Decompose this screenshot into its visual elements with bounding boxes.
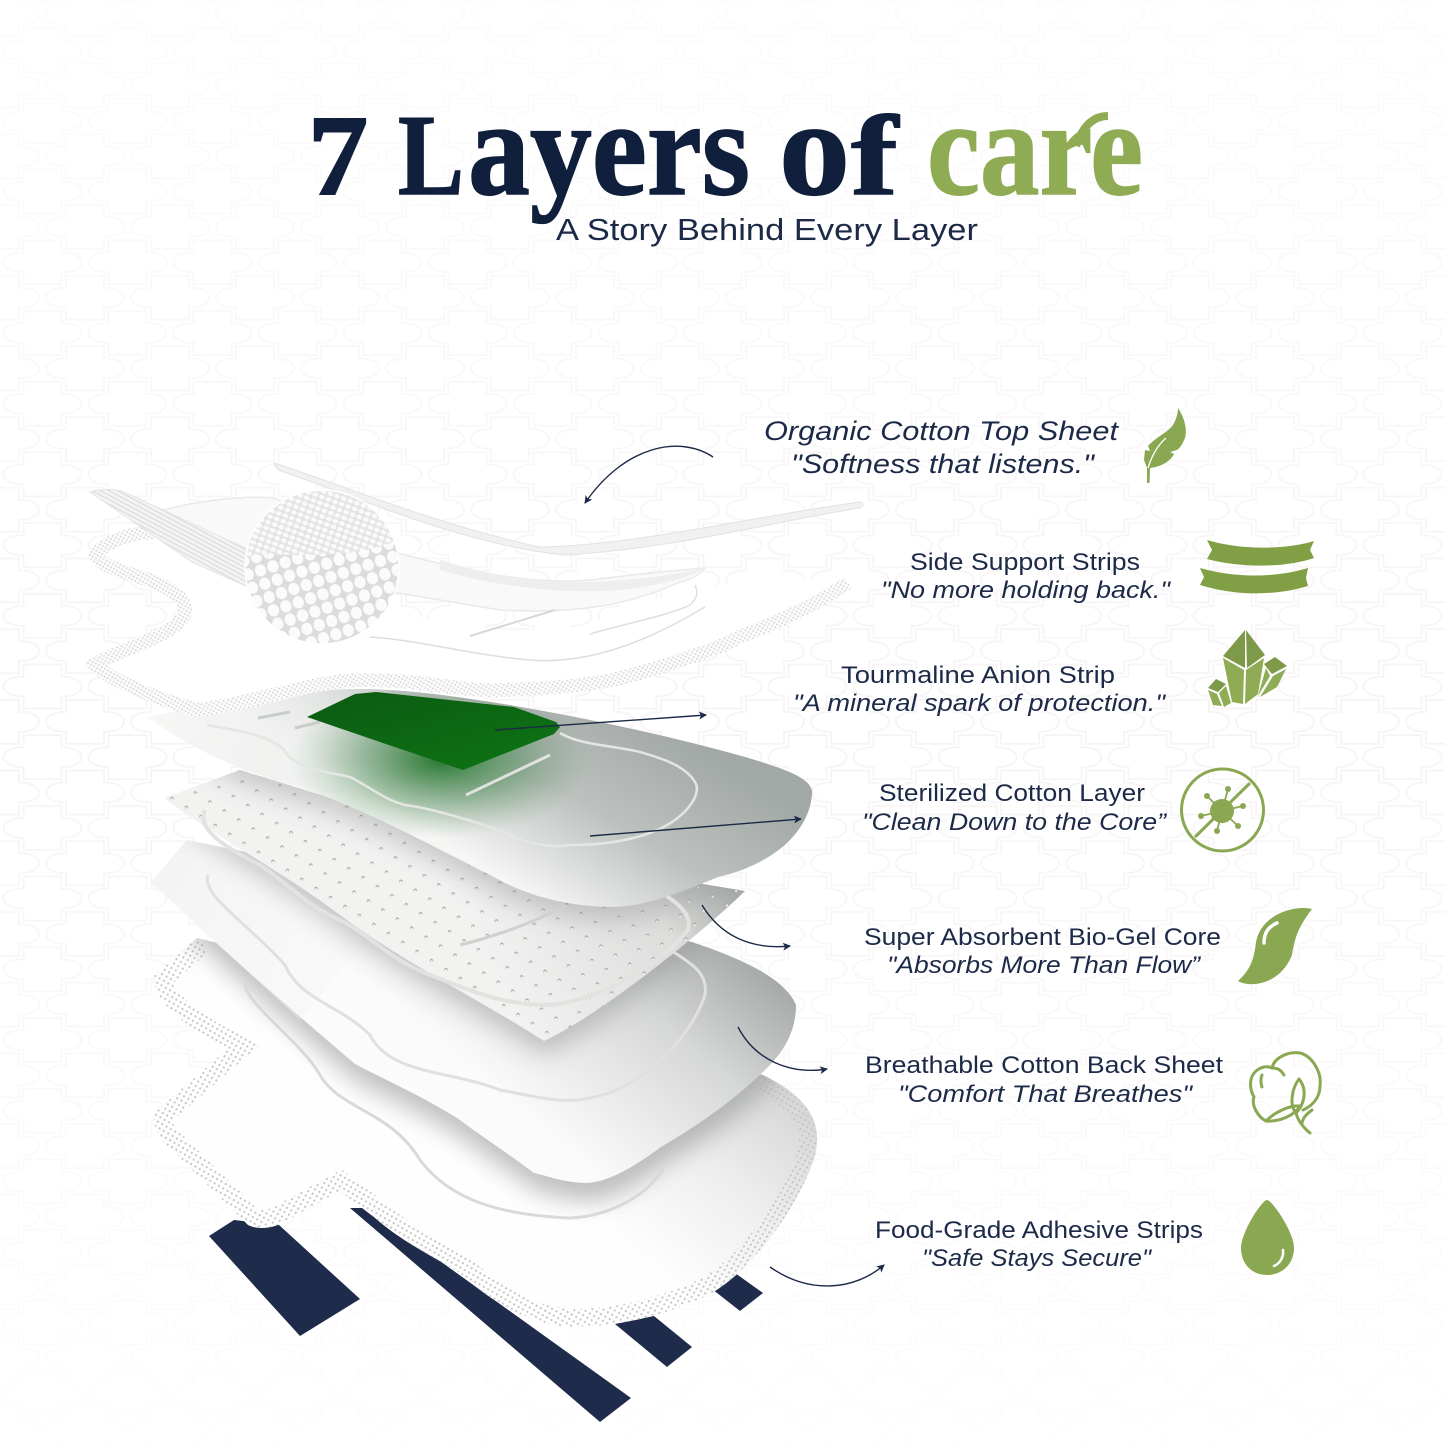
- layer 3: sterilized cotton layer: [147, 682, 812, 907]
- zoom circle: knit texture: [244, 490, 398, 644]
- text: sterilized cotton layer: [862, 780, 1167, 836]
- text: tourmaline anion strip: [793, 662, 1167, 717]
- subtitle: A Story Behind Every Layer: [556, 212, 978, 247]
- text: side support strips: [881, 549, 1172, 604]
- arrow: tourmaline strip: [495, 715, 706, 730]
- icon: water drop: [1241, 1200, 1294, 1275]
- title: care: [927, 74, 1143, 224]
- text: sterilized cotton layer: Sterilized Cotton Layer: [879, 780, 1145, 807]
- icon: ribbons: [1200, 540, 1314, 593]
- title: o: [779, 74, 850, 224]
- text: side support strips: "No more holding back.": [881, 577, 1172, 604]
- layer 5: breathable back sheet: [152, 840, 796, 1183]
- pad exploded diagram: [85, 463, 863, 1422]
- text: super absorbent bio-gel core: Super Absorbent Bio-Gel Core: [864, 924, 1221, 951]
- arrow: sterilized cotton: [590, 819, 801, 836]
- stitched edge of wing sheet: [85, 525, 852, 717]
- text: breathable cotton back sheet: [865, 1052, 1223, 1108]
- text: breathable cotton back sheet: Breathable Cotton Back Sheet: [865, 1052, 1223, 1079]
- title: ayers: [468, 74, 750, 224]
- long left side strip: [90, 490, 248, 587]
- layer 4: perforated bio-gel core: [164, 770, 745, 1041]
- text: food-grade adhesive strips: "Safe Stays Secure": [922, 1245, 1153, 1272]
- layer 6: food-grade bottom sheet: [154, 938, 818, 1326]
- text: tourmaline anion strip: Tourmaline Anion Strip: [841, 662, 1115, 689]
- text: food-grade adhesive strips: [875, 1217, 1203, 1272]
- icon: feather: [1144, 408, 1186, 483]
- icon: gel: [1238, 908, 1312, 984]
- back side sheet: [164, 497, 705, 611]
- text: breathable cotton back sheet: "Comfort That Breathes": [898, 1081, 1194, 1108]
- text: sterilized cotton layer: "Clean Down to the Core”: [862, 809, 1167, 836]
- text: super absorbent bio-gel core: "Absorbs More Than Flow”: [887, 952, 1201, 979]
- background tile pattern: [0, 368, 1445, 1002]
- layer 2: tourmaline anion strip: [307, 692, 560, 770]
- title: L: [398, 92, 464, 220]
- text: tourmaline anion strip: "A mineral spark of protection.": [793, 690, 1167, 717]
- text: organic cotton top sheet: [764, 416, 1120, 479]
- text: super absorbent bio-gel core: [864, 924, 1221, 979]
- arrow: back sheet: [738, 1027, 827, 1070]
- title: 7: [308, 92, 368, 219]
- layer 7: navy adhesive strips: [209, 1208, 763, 1422]
- text: organic cotton top sheet: Organic Cotton Top Sheet: [764, 416, 1120, 446]
- arrow: top sheet: [585, 446, 713, 503]
- long right side strip: [274, 463, 863, 555]
- title: [308, 74, 1143, 224]
- text: organic cotton top sheet: "Softness that listens.": [791, 449, 1096, 479]
- layer 1: organic cotton top sheet: [85, 463, 863, 717]
- title: f: [851, 92, 901, 219]
- icon: no virus: [1182, 769, 1264, 851]
- arrow: bio-gel core: [702, 905, 790, 947]
- main wing sheet: [85, 525, 852, 717]
- arrow: adhesive strips: [770, 1265, 884, 1286]
- text: food-grade adhesive strips: Food-Grade Adhesive Strips: [875, 1217, 1203, 1244]
- icon: cotton boll: [1250, 1053, 1320, 1133]
- icon: crystals: [1208, 630, 1287, 707]
- text: side support strips: Side Support Strips: [910, 549, 1140, 576]
